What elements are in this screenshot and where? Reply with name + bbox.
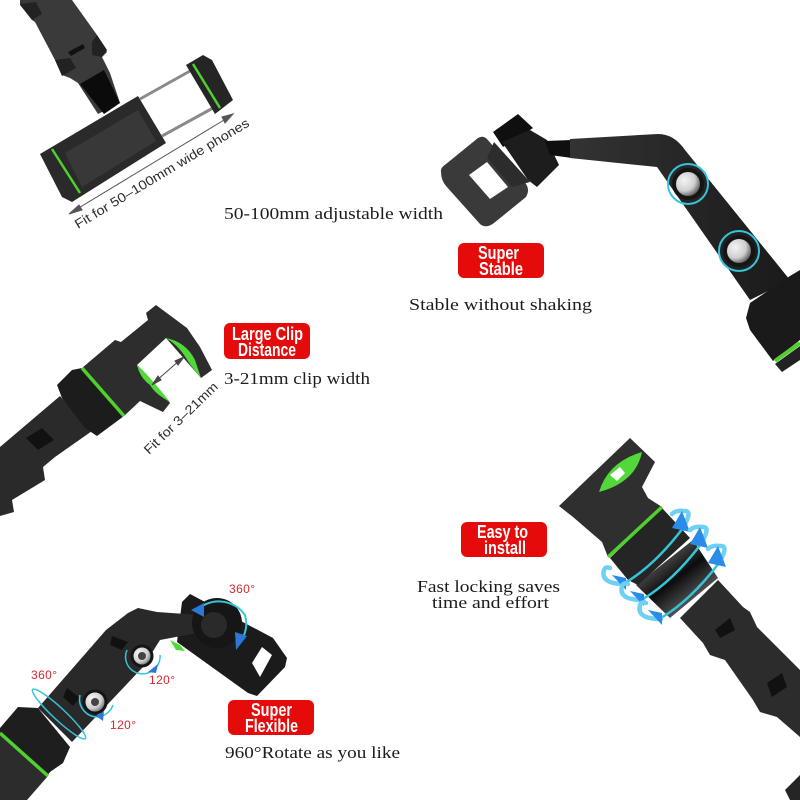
holder arm bbox=[20, 0, 120, 114]
badge: super flexible: Flexible bbox=[245, 716, 298, 736]
badge: super flexible bbox=[228, 700, 314, 736]
ball knob bbox=[502, 130, 559, 187]
badge: easy to install: Easy to bbox=[477, 522, 528, 542]
textured grip bbox=[65, 110, 156, 187]
clip body bbox=[82, 305, 212, 416]
panel: large clip bbox=[0, 305, 221, 516]
rotation arcs bbox=[29, 601, 247, 743]
green ring bbox=[608, 507, 662, 557]
corner fragment bbox=[785, 775, 800, 800]
carbon clip section bbox=[487, 142, 530, 187]
angle label lower bolt: 120° bbox=[110, 718, 136, 732]
collar green ring bbox=[775, 343, 800, 361]
bracket green accent bbox=[170, 640, 185, 651]
arm slots bbox=[63, 636, 128, 706]
clip distance arrow bbox=[152, 357, 184, 385]
badge: large clip distance: Large Clip bbox=[232, 324, 303, 344]
holder end pad bbox=[186, 55, 233, 114]
clip plate bbox=[441, 137, 528, 226]
angle label left: 360° bbox=[31, 668, 57, 682]
width arrow bbox=[69, 114, 233, 214]
rotation arrow 3 bbox=[639, 546, 726, 625]
description: stable: Stable without shaking bbox=[409, 295, 593, 314]
knob green ring bbox=[82, 368, 124, 416]
ball joint bbox=[192, 598, 242, 648]
panel: easy install bbox=[559, 438, 800, 800]
bracket plate bbox=[177, 594, 287, 696]
width fit label: Fit for 50–100mm wide phones bbox=[72, 115, 252, 232]
lower bolt bbox=[84, 691, 106, 713]
rotary knob bbox=[57, 368, 124, 436]
angle label top: 360° bbox=[229, 582, 255, 596]
lower arm bbox=[680, 580, 800, 737]
description: fast locking bbox=[417, 577, 560, 612]
head eye center bbox=[610, 467, 625, 481]
badge: super flexible: Super bbox=[251, 700, 292, 720]
bent arm bbox=[570, 134, 790, 300]
badge: super stable bbox=[458, 243, 544, 279]
lower bolt bbox=[719, 231, 759, 271]
badge: easy to install bbox=[461, 522, 547, 558]
collar knob bbox=[0, 707, 70, 776]
collar lower bbox=[0, 733, 48, 800]
arm slots bbox=[715, 618, 787, 697]
stem bbox=[545, 140, 572, 158]
angle label upper bolt: 120° bbox=[149, 673, 175, 687]
green ring bbox=[0, 733, 48, 776]
badge: large clip distance bbox=[224, 323, 310, 360]
head bbox=[559, 438, 662, 557]
description: clip width: 3-21mm clip width bbox=[224, 369, 371, 388]
head green eye bbox=[599, 452, 642, 492]
arm slot bbox=[26, 428, 54, 450]
holder rails bbox=[140, 71, 213, 136]
badge: super stable: Super bbox=[478, 243, 519, 263]
rotation arrow 2 bbox=[621, 527, 708, 606]
collar knob bbox=[746, 270, 800, 361]
arm dark wedge bbox=[80, 70, 120, 114]
ball knob back bbox=[493, 114, 533, 147]
panel: flexible rotation bbox=[0, 582, 287, 800]
green stripes bbox=[52, 64, 220, 193]
badge: super stable: Stable bbox=[479, 259, 523, 279]
panel: stable arm bbox=[441, 114, 800, 372]
description: fast locking: time and effort bbox=[432, 593, 549, 612]
upper bolt bbox=[668, 164, 708, 204]
description: adjustable width: 50-100mm adjustable width bbox=[224, 204, 444, 223]
rotation arrow 1 bbox=[603, 511, 690, 590]
holder main body bbox=[40, 96, 166, 202]
clip green pad upper bbox=[166, 338, 201, 378]
badge: easy to install: install bbox=[484, 538, 526, 558]
flexible arm bbox=[38, 608, 200, 742]
description: fast locking: Fast locking saves bbox=[417, 577, 560, 596]
arm lobes bbox=[20, 2, 107, 76]
knob bbox=[610, 508, 690, 585]
threaded collar bbox=[636, 540, 718, 618]
collar lower bbox=[775, 346, 800, 372]
arm slot bbox=[68, 44, 85, 56]
badge: large clip distance: Distance bbox=[238, 340, 296, 360]
clip green pad lower bbox=[137, 365, 170, 402]
description: rotate: 960°Rotate as you like bbox=[225, 743, 400, 762]
arm bbox=[0, 396, 92, 516]
clip fit label: Fit for 3–21mm bbox=[141, 379, 221, 457]
upper bolt bbox=[132, 646, 152, 666]
panel: phone holder width bbox=[20, 0, 252, 232]
